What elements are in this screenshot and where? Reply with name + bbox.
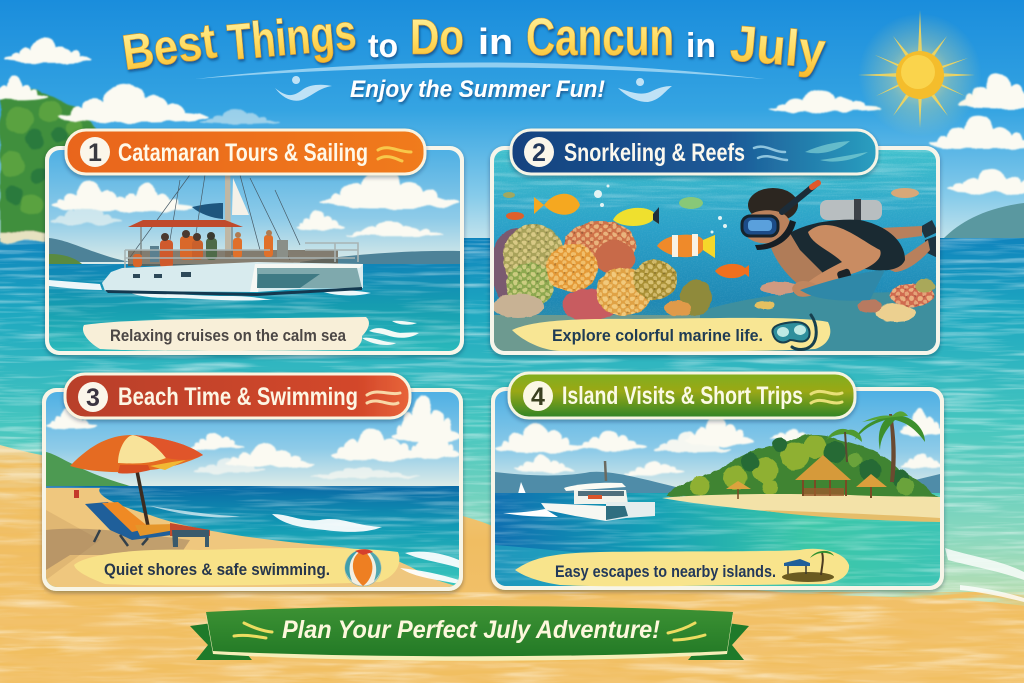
coral reef	[491, 221, 935, 322]
icon: sun	[858, 10, 982, 137]
seabed	[690, 285, 936, 351]
scene: island with boat	[495, 391, 945, 586]
white catamaran	[503, 461, 655, 521]
number badge 3	[78, 382, 108, 412]
number badge 3: 3	[86, 384, 100, 412]
panel 1: catamaran tours	[45, 145, 464, 355]
subtitle: Enjoy the Summer Fun!	[350, 76, 605, 103]
number badge 2	[524, 137, 554, 167]
caption 4: Easy escapes to nearby islands.	[555, 562, 776, 581]
sand shore	[46, 488, 459, 587]
icon: cream waves	[367, 392, 400, 404]
beach sand	[662, 494, 940, 522]
icon: right yellow dashes	[668, 623, 705, 640]
icon: blue waves	[754, 147, 787, 160]
title underline arc	[195, 62, 765, 79]
icon: snorkel mask	[772, 315, 816, 350]
caption 3: Quiet shores & safe swimming.	[104, 560, 330, 579]
icon: left swoosh	[275, 76, 332, 101]
title: Cancun	[526, 8, 674, 67]
beach umbrella	[70, 435, 203, 526]
icon: left yellow dashes	[234, 623, 272, 638]
icon: white waves	[362, 321, 419, 345]
foam	[150, 506, 459, 584]
heading 3: Beach Time & Swimming	[118, 383, 358, 411]
palm tree	[826, 411, 925, 482]
background: tropical island left	[0, 88, 112, 241]
heading 1	[66, 130, 425, 174]
title: Things	[225, 3, 358, 71]
heading 4: Island Visits & Short Trips	[562, 382, 803, 410]
background: sky	[0, 0, 1024, 245]
passengers	[133, 230, 288, 268]
title: Best	[119, 12, 220, 81]
call-to-action banner: Plan Your Perfect July Adventure!	[282, 616, 660, 644]
banner tails	[190, 622, 749, 660]
background: sand beach	[0, 440, 1024, 683]
call-to-action banner	[190, 606, 749, 661]
icon: yellow waves	[378, 148, 411, 161]
beach lounger	[74, 490, 210, 547]
title: in	[686, 27, 716, 65]
heading 4	[509, 373, 855, 418]
title: to	[368, 27, 398, 64]
scene: underwater reef and snorkeler	[491, 150, 938, 351]
title: July	[728, 14, 828, 79]
snorkeler	[742, 183, 938, 301]
number badge 4	[523, 381, 553, 411]
title: Do	[410, 9, 464, 65]
heading 1: Catamaran Tours & Sailing	[118, 139, 368, 167]
fish	[503, 184, 919, 278]
number badge 2: 2	[532, 139, 546, 167]
thatched huts	[726, 455, 887, 499]
heading 2	[511, 130, 877, 174]
boat wake	[49, 280, 371, 301]
caption 4	[515, 549, 849, 586]
background: distant hills right	[944, 203, 1024, 238]
panel 2: snorkeling	[490, 146, 940, 355]
icon: right swoosh	[618, 78, 672, 102]
icon: yellow-green waves	[811, 391, 842, 403]
icon: beach ball	[345, 549, 381, 586]
caption 3	[74, 548, 399, 585]
background: clouds	[0, 38, 1024, 193]
panel 3: beach time	[42, 388, 463, 591]
caption 2: Explore colorful marine life.	[552, 326, 763, 345]
caption 2	[512, 318, 830, 352]
caption 1: Relaxing cruises on the calm sea	[110, 326, 346, 345]
caption 1	[83, 317, 369, 351]
background: sea	[0, 238, 1024, 613]
title: in	[478, 21, 513, 62]
panel 4: island visits	[491, 387, 945, 590]
scene: beach with umbrella	[46, 392, 462, 587]
number badge 1: 1	[88, 139, 102, 167]
scene: catamaran at sea	[49, 145, 460, 351]
heading 3	[65, 374, 410, 418]
title	[119, 3, 828, 81]
icon: island hut and palm	[782, 551, 834, 582]
number badge 1	[80, 137, 110, 167]
heading 2: Snorkeling & Reefs	[564, 139, 745, 167]
number badge 4: 4	[531, 383, 545, 411]
catamaran	[102, 176, 363, 296]
island trees	[667, 435, 940, 503]
